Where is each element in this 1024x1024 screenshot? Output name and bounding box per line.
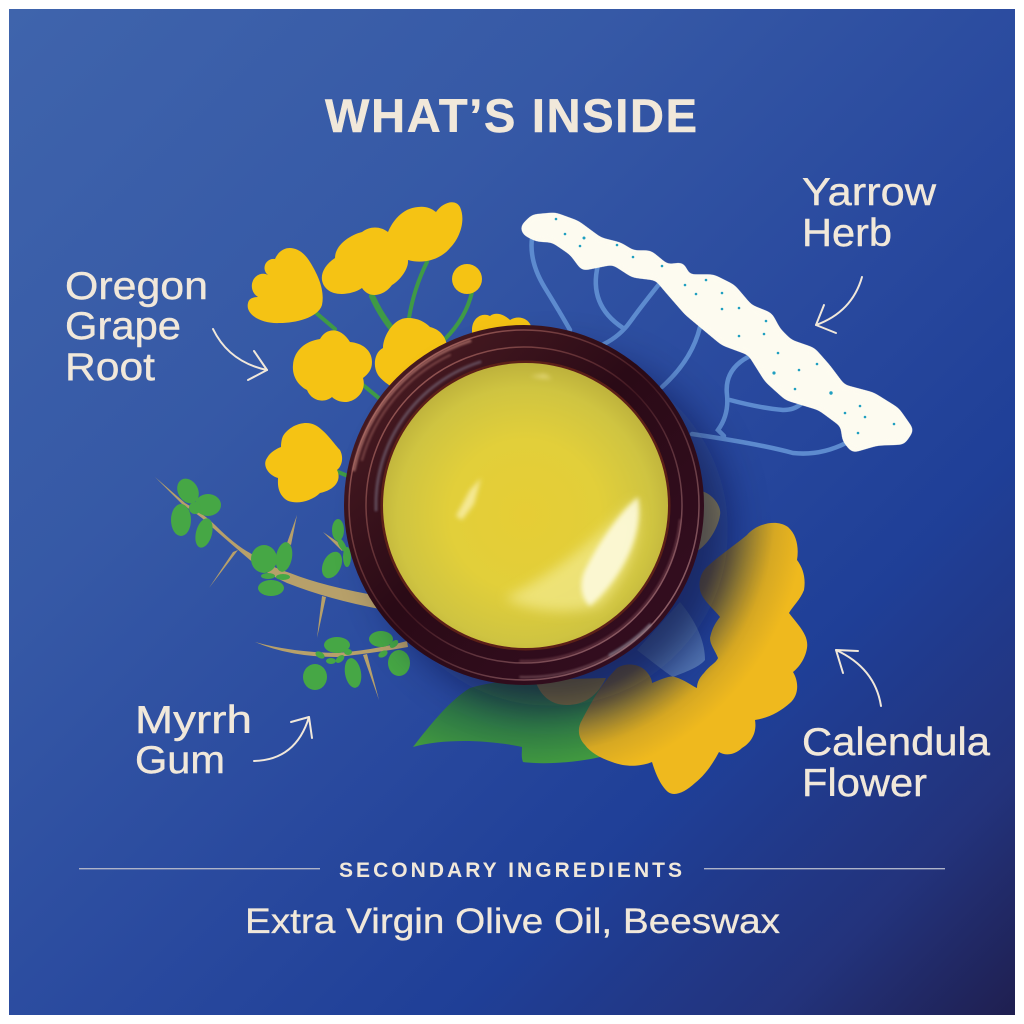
secondary ingredients list: Extra Virgin Olive Oil, Beeswax [245, 902, 781, 941]
secondary ingredients heading: SECONDARY INGREDIENTS [339, 859, 682, 882]
balm surface [383, 363, 668, 648]
balm highlight [456, 374, 639, 611]
jar rim highlights [354, 341, 680, 677]
illustration: Oregon grape flowers [248, 202, 531, 502]
yarrow blossom [523, 215, 911, 450]
label: Calendula Flower: Calendula [802, 721, 990, 764]
arrow: Calendula Flower [836, 650, 881, 706]
yarrow veins [532, 238, 846, 454]
jar outer rim [344, 325, 704, 685]
label: Oregon Grape Root: Root [65, 346, 155, 389]
title: WHAT’S INSIDE [325, 89, 697, 142]
arrow: Oregon Grape Root [213, 329, 267, 380]
yellow calendula petals [579, 523, 807, 794]
illustration: Calendula flower and leaf [413, 490, 807, 794]
label: Oregon Grape Root: Oregon [65, 265, 208, 308]
green leaf [413, 679, 600, 763]
label: Calendula Flower [802, 721, 990, 805]
tan shaded petals [535, 490, 720, 705]
label: Myrrh Gum: Gum [135, 739, 225, 782]
balm jar [344, 325, 704, 685]
arrow: Myrrh Gum [254, 717, 312, 761]
flower stems [315, 262, 472, 476]
arrow: Yarrow Herb [816, 277, 862, 333]
label: Oregon Grape Root [65, 265, 208, 389]
flower blossoms [248, 202, 531, 502]
translucent blue petal [637, 602, 705, 677]
label: Myrrh Gum: Myrrh [135, 699, 252, 742]
label: Yarrow Herb: Herb [802, 212, 892, 255]
label: Yarrow Herb [802, 171, 937, 255]
label: Oregon Grape Root: Grape [65, 305, 181, 348]
jar drop shadow [376, 354, 728, 706]
illustration: Myrrh branches [155, 475, 410, 700]
divider left [79, 868, 320, 869]
label: Yarrow Herb: Yarrow [802, 171, 937, 214]
label: Myrrh Gum [135, 699, 252, 782]
myrrh branch wood [155, 477, 408, 700]
jar inner edge [380, 360, 670, 650]
label: Calendula Flower: Flower [802, 762, 927, 805]
illustration: Yarrow herb [523, 215, 911, 454]
myrrh leaves [171, 475, 410, 690]
divider right [704, 868, 945, 869]
yarrow speckles [555, 218, 895, 434]
